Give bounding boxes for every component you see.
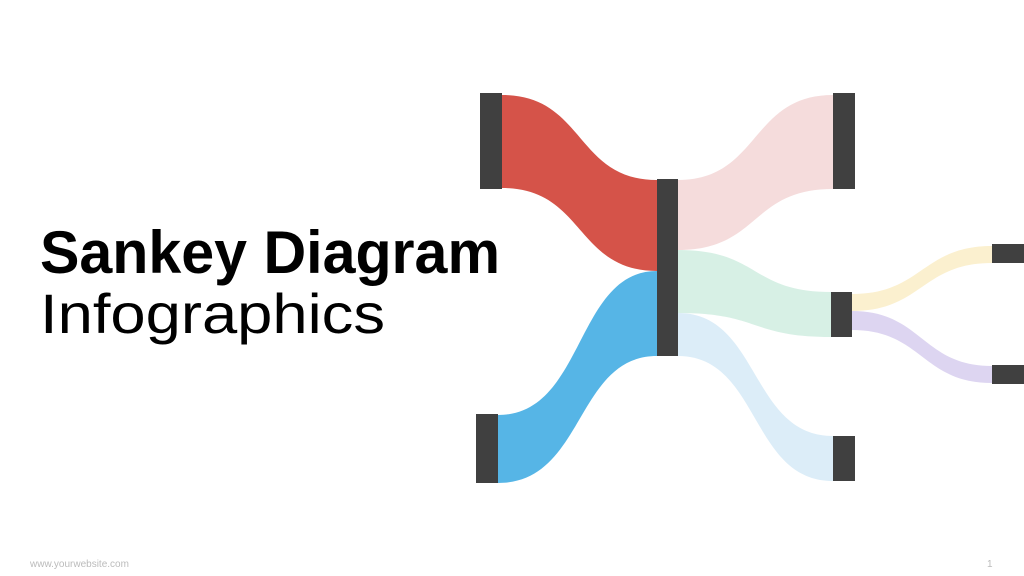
title: Sankey Diagram [40,219,500,286]
flow: blue [498,271,657,483]
flow: red [502,95,657,271]
flow: pink [678,95,833,250]
sankey diagram [476,93,1024,483]
title [40,219,500,345]
footer url: www.yourwebsite.com [29,559,129,570]
flow: purple [852,311,992,383]
nodes [476,93,1024,483]
flow: light blue [678,313,833,481]
page number: 1 [987,559,993,570]
flow: green [678,250,831,337]
flow: yellow [852,246,992,311]
title: Infographics [40,282,385,345]
